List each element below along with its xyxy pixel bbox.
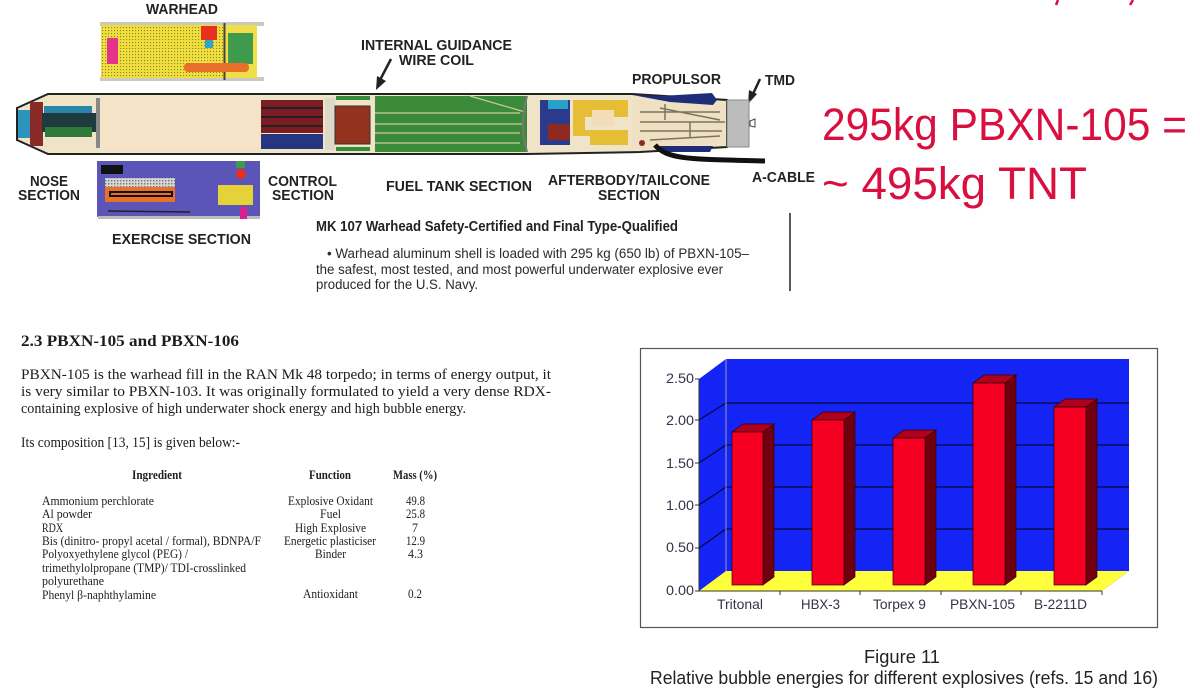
label: afterbody/tailcone section: AFTERBODY/TAILCONE [548, 173, 710, 189]
text block: PBXN-105 description: Its composition [13, 15] is given below:- [21, 435, 240, 451]
y axis labels: 2.50 [666, 370, 694, 386]
callout: TNT equivalence: 295kg PBXN-105 = [822, 99, 1187, 150]
exercise section illustration [97, 161, 260, 219]
x axis labels: Tritonal [717, 596, 763, 612]
y axis labels: 0.00 [666, 582, 694, 598]
y axis labels: 1.50 [666, 455, 694, 471]
table rows: Explosive Oxidant [288, 494, 374, 508]
bar: B-2211D [1054, 399, 1097, 585]
control section [261, 98, 335, 150]
table rows: 0.2 [408, 587, 422, 601]
panel: torpedo diagram [17, 2, 815, 248]
label: A-cable: A-CABLE [752, 170, 815, 186]
text block: PBXN-105 description: containing explosive of high underwater shock energy and high bubble energy. [21, 401, 466, 417]
text block: MK 107 warhead note: the safest, most tested, and most powerful underwater explosive ever [316, 262, 723, 277]
warhead section illustration [100, 22, 264, 81]
table rows: polyurethane [42, 574, 104, 588]
text block: PBXN-105 description: PBXN-105 is the warhead fill in the RAN Mk 48 torpedo; in terms of energy output, it [21, 367, 552, 383]
fuel tank section [336, 96, 527, 152]
callout: TNT equivalence [822, 0, 1187, 209]
label: control section: SECTION [272, 188, 334, 204]
guidance wire coil block [335, 106, 370, 144]
label: warhead: WARHEAD [146, 2, 218, 18]
table rows: Fuel [320, 507, 342, 521]
label: TMD: TMD [765, 73, 795, 89]
label: fuel tank section: FUEL TANK SECTION [386, 179, 532, 195]
bar: PBXN-105 [973, 375, 1016, 585]
bar: HBX-3 [812, 412, 855, 585]
label: control section [268, 174, 337, 204]
label: internal guidance wire coil: WIRE COIL [399, 53, 474, 69]
label: nose section: SECTION [18, 188, 80, 204]
table rows: High Explosive [295, 521, 366, 535]
label: afterbody/tailcone section: SECTION [598, 188, 660, 204]
panel: bubble energy bar chart [640, 348, 1158, 628]
table rows: trimethylolpropane (TMP)/ TDI-crosslinked [42, 561, 246, 575]
y axis labels: 2.00 [666, 412, 694, 428]
label: internal guidance wire coil [361, 38, 512, 69]
y axis labels: 0.50 [666, 539, 694, 555]
table rows: Antioxidant [303, 587, 359, 601]
table rows: 12.9 [406, 534, 425, 548]
table header [132, 468, 437, 482]
bar: Tritonal [732, 424, 774, 585]
table: PBXN-105 composition [42, 468, 437, 602]
TMD unit [727, 100, 755, 147]
table rows: 25.8 [406, 507, 425, 521]
A-cable [655, 145, 765, 161]
table rows: 49.8 [406, 494, 425, 508]
text block: MK 107 warhead note: • Warhead aluminum shell is loaded with 295 kg (650 lb) of PBXN-105– [327, 246, 749, 261]
table header: Mass (%) [393, 468, 437, 482]
label: control section: CONTROL [268, 174, 337, 190]
chart walls and floor [695, 359, 1129, 595]
y axis labels [666, 370, 694, 598]
table rows: Bis (dinitro- propyl acetal / formal), BDNPA/F [42, 534, 261, 548]
label: afterbody/tailcone section [548, 173, 710, 204]
label: internal guidance wire coil: INTERNAL GUIDANCE [361, 38, 512, 54]
table header: Function [309, 468, 351, 482]
text block: PBXN-105 description [21, 367, 552, 451]
x axis labels: B-2211D [1034, 596, 1087, 612]
table rows [42, 494, 425, 602]
label: propulsor: PROPULSOR [632, 72, 722, 88]
torpedo body cutaway [17, 93, 765, 161]
warhead bay [101, 97, 260, 149]
text block: MK 107 warhead note [316, 219, 749, 292]
figure caption [650, 647, 1158, 688]
heading: section 2.3: 2.3 PBXN-105 and PBXN-106 [21, 333, 239, 350]
figure caption: Figure 11 [864, 647, 940, 667]
table rows: Energetic plasticiser [284, 534, 376, 548]
table rows: Al powder [42, 507, 92, 521]
label: nose section [18, 174, 80, 204]
table header: Ingredient [132, 468, 182, 482]
table rows: Ammonium perchlorate [42, 494, 154, 508]
text block: MK 107 warhead note: produced for the U.S. Navy. [316, 277, 478, 292]
label: exercise section: EXERCISE SECTION [112, 232, 251, 248]
text block: PBXN-105 description: is very similar to PBXN-103. It was originally formulated to yield a very dense RDX- [21, 384, 551, 400]
table rows: Polyoxyethylene glycol (PEG) / [42, 547, 189, 561]
propulsor shroud [632, 93, 717, 152]
arrow: TMD [748, 79, 760, 104]
bar: Torpex 9 [893, 430, 936, 585]
callout: TNT equivalence: ~ 495kg TNT [822, 158, 1087, 209]
table rows: Phenyl β-naphthylamine [42, 588, 156, 602]
x axis labels: HBX-3 [801, 596, 840, 612]
x axis labels: PBXN-105 [950, 596, 1015, 612]
label: nose section: NOSE [30, 174, 68, 190]
table rows: Binder [315, 547, 346, 561]
table rows: 4.3 [408, 547, 423, 561]
text block: MK 107 warhead note: MK 107 Warhead Safety-Certified and Final Type-Qualified [316, 219, 678, 235]
nose section [18, 98, 100, 148]
afterbody and tailcone section [540, 100, 725, 149]
arrow: guidance wire coil [376, 59, 391, 90]
x axis labels [717, 596, 1087, 612]
y axis labels: 1.00 [666, 497, 694, 513]
figure caption: Relative bubble energies for different explosives (refs. 15 and 16) [650, 668, 1158, 688]
table rows: RDX [42, 521, 63, 535]
x axis labels: Torpex 9 [873, 596, 926, 612]
table rows: 7 [412, 521, 418, 535]
